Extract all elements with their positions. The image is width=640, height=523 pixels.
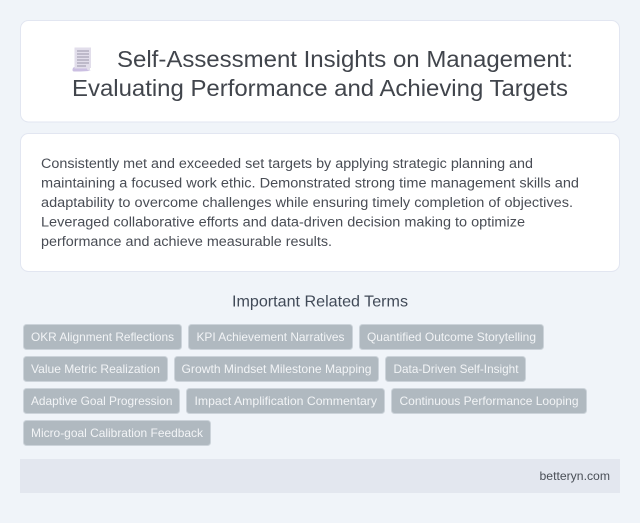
summary paragraph: performance and achieve measurable results. bbox=[41, 234, 332, 250]
footer site name: betteryn.com bbox=[540, 469, 610, 483]
tag: Value Metric Realization bbox=[31, 362, 160, 376]
footer bbox=[20, 459, 620, 493]
tag bbox=[24, 420, 210, 446]
heading: related terms: Important Related Terms bbox=[232, 294, 408, 310]
summary paragraph: adaptability to overcome challenges while ensuring timely completion of objectives. bbox=[41, 195, 573, 211]
tag bbox=[392, 388, 586, 414]
tag: Continuous Performance Looping bbox=[400, 394, 578, 408]
summary paragraph: Leveraged collaborative efforts and data-driven decision making to optimize bbox=[41, 214, 525, 230]
panel: term tags bbox=[24, 324, 586, 446]
title: Self-Assessment Insights on Management: bbox=[117, 46, 573, 72]
tag: Quantified Outcome Storytelling bbox=[367, 330, 536, 344]
summary paragraph: maintaining a focused work ethic. Demonstrated strong time management skills and bbox=[41, 176, 579, 192]
icon: document scroll bbox=[72, 48, 91, 72]
tag: KPI Achievement Narratives bbox=[196, 330, 344, 344]
tag bbox=[24, 388, 180, 414]
tag bbox=[188, 324, 352, 350]
title bbox=[72, 46, 573, 101]
tag: Impact Amplification Commentary bbox=[194, 394, 377, 408]
title: Evaluating Performance and Achieving Targets bbox=[72, 75, 568, 101]
tag: Data-Driven Self-Insight bbox=[394, 362, 519, 376]
tag bbox=[360, 324, 544, 350]
panel: title card bbox=[20, 20, 620, 122]
summary paragraph: Consistently met and exceeded set targets by applying strategic planning and bbox=[41, 156, 533, 172]
tag: Micro-goal Calibration Feedback bbox=[31, 426, 204, 440]
tag: OKR Alignment Reflections bbox=[31, 330, 174, 344]
panel: summary text card bbox=[20, 134, 620, 272]
tag bbox=[24, 356, 168, 382]
tag bbox=[386, 356, 526, 382]
tag bbox=[186, 388, 384, 414]
tag: Adaptive Goal Progression bbox=[31, 394, 172, 408]
tag: Growth Mindset Milestone Mapping bbox=[182, 362, 372, 376]
tag bbox=[24, 324, 182, 350]
tag bbox=[174, 356, 378, 382]
summary paragraph bbox=[41, 156, 579, 250]
